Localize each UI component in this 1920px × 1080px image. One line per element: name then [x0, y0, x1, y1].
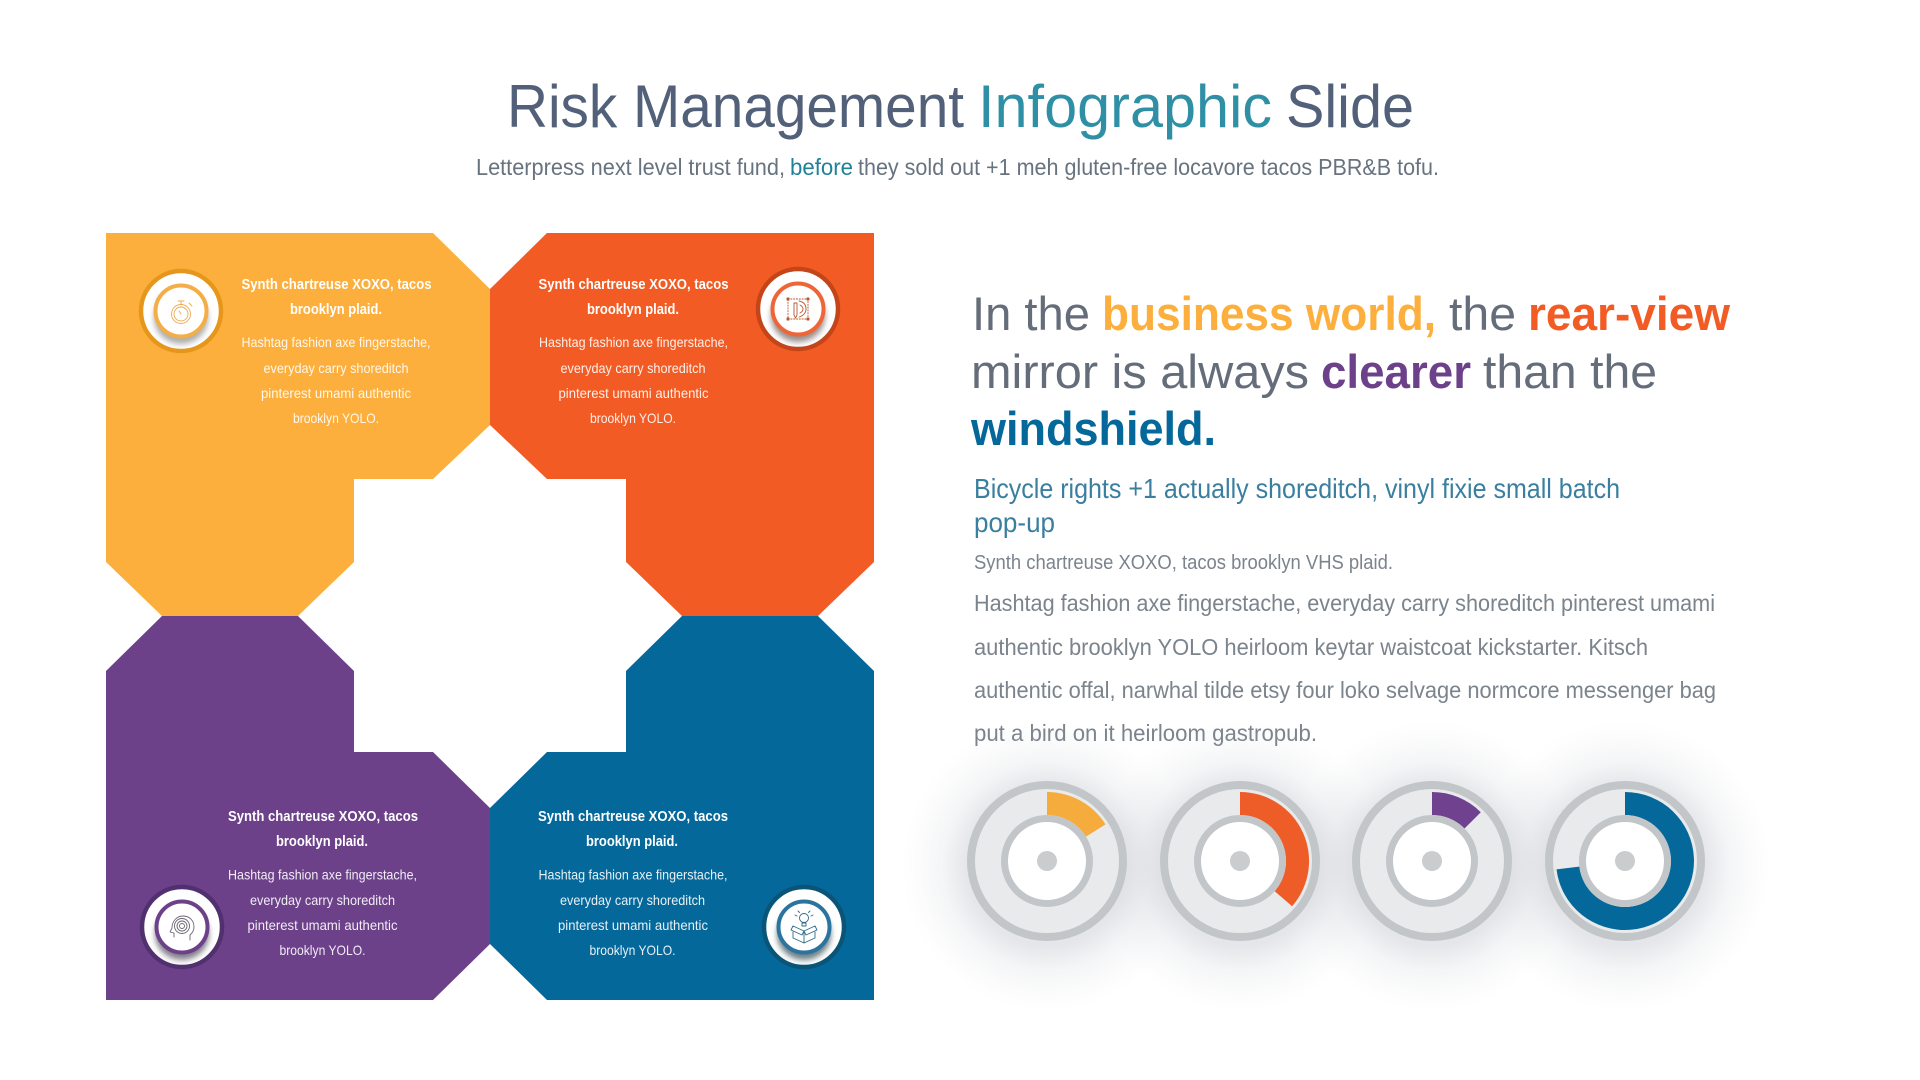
headline quote: mirror is always — [971, 345, 1309, 398]
body paragraph: Hashtag fashion axe fingerstache, everyday carry shoreditch pinterest umami — [974, 590, 1715, 616]
body paragraph: authentic offal, narwhal tilde etsy four loko selvage normcore messenger bag — [974, 677, 1716, 703]
headline quote: the — [1449, 287, 1516, 340]
text: blue panel: everyday carry shoreditch — [560, 892, 705, 908]
donut: orange — [1164, 785, 1316, 937]
title: Infographic — [978, 73, 1272, 140]
text: purple panel: Hashtag fashion axe fingerstache, — [228, 866, 417, 882]
text: yellow panel: Hashtag fashion axe fingerstache, — [242, 334, 430, 350]
subheading: pop-up — [974, 507, 1055, 538]
text: orange panel: brooklyn YOLO. — [590, 410, 676, 426]
text: yellow panel — [242, 277, 432, 426]
text: orange panel: everyday carry shoreditch — [560, 360, 706, 376]
donut: yellow — [971, 785, 1123, 937]
subtitle: Letterpress next level trust fund, — [476, 154, 785, 180]
donut: blue — [1549, 785, 1701, 937]
subheading: Bicycle rights +1 actually shoreditch, vinyl fixie small batch — [974, 473, 1620, 504]
headline quote: rear-view — [1528, 287, 1730, 340]
text: purple panel: brooklyn plaid. — [276, 834, 368, 850]
panel: orange — [490, 233, 874, 616]
text: blue panel — [538, 809, 728, 958]
text: blue panel: Synth chartreuse XOXO, tacos — [538, 809, 728, 825]
text: purple panel: Synth chartreuse XOXO, tacos — [228, 809, 418, 825]
headline quote: business world, — [1102, 287, 1436, 340]
title — [507, 73, 1414, 140]
text: yellow panel: everyday carry shoreditch — [264, 360, 408, 376]
text: orange panel: brooklyn plaid. — [587, 302, 679, 318]
text: yellow panel: brooklyn YOLO. — [293, 410, 379, 426]
text: purple panel — [228, 809, 418, 958]
text: orange panel: Synth chartreuse XOXO, tacos — [538, 277, 728, 293]
text: blue panel: brooklyn plaid. — [586, 834, 678, 850]
subtitle: before — [790, 154, 853, 180]
icon: stopwatch — [141, 271, 221, 351]
body paragraph — [974, 590, 1716, 746]
icon: box with bulb — [764, 887, 844, 967]
text: yellow panel: brooklyn plaid. — [290, 302, 382, 318]
icon: head with maze — [142, 887, 222, 967]
text: orange panel — [538, 277, 728, 426]
panel: purple — [106, 616, 490, 1000]
text: purple panel: brooklyn YOLO. — [280, 942, 366, 958]
headline quote: windshield. — [970, 402, 1216, 455]
text: purple panel: everyday carry shoreditch — [250, 892, 395, 908]
text: yellow panel: pinterest umami authentic — [261, 385, 411, 401]
title: Slide — [1286, 73, 1414, 140]
subtitle — [476, 154, 1439, 180]
panel: blue — [490, 616, 874, 1000]
subheading — [974, 473, 1620, 538]
headline quote: than the — [1483, 345, 1657, 398]
text: orange panel: Hashtag fashion axe fingerstache, — [539, 334, 728, 350]
panel: yellow — [106, 233, 490, 616]
headline quote: clearer — [1321, 345, 1471, 398]
text: blue panel: Hashtag fashion axe fingerstache, — [538, 866, 728, 882]
subtitle: they sold out +1 meh gluten-free locavore tacos PBR&B tofu. — [858, 154, 1439, 180]
donut charts — [902, 721, 1770, 1011]
title: Risk Management — [507, 73, 964, 140]
small caption: Synth chartreuse XOXO, tacos brooklyn VHS plaid. — [974, 552, 1393, 574]
body paragraph: put a bird on it heirloom gastropub. — [974, 720, 1317, 746]
donut: purple — [1356, 785, 1508, 937]
icon: pencil and gear — [758, 269, 838, 349]
text: blue panel: pinterest umami authentic — [558, 917, 708, 933]
headline quote: In the — [972, 287, 1090, 340]
text: yellow panel: Synth chartreuse XOXO, tacos — [242, 277, 432, 293]
text: orange panel: pinterest umami authentic — [558, 385, 708, 401]
text: purple panel: pinterest umami authentic — [248, 917, 398, 933]
headline quote — [970, 287, 1730, 455]
body paragraph: authentic brooklyn YOLO heirloom keytar waistcoat kickstarter. Kitsch — [974, 634, 1648, 660]
text: blue panel: brooklyn YOLO. — [590, 942, 676, 958]
